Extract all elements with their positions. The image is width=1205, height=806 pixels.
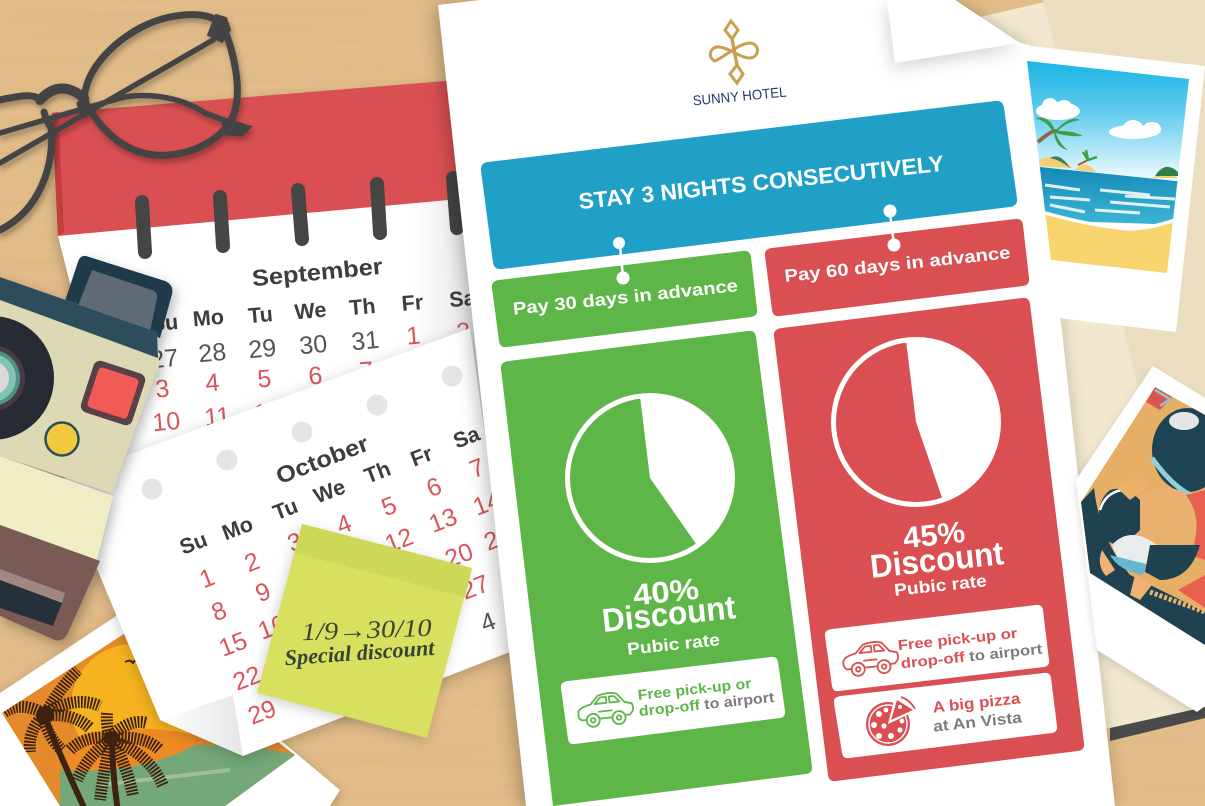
- folded corner: [160, 695, 243, 756]
- September grid: 1: [405, 321, 421, 351]
- September grid: 27: [149, 344, 179, 374]
- October grid: 4: [477, 607, 500, 638]
- October grid: 13: [425, 502, 461, 539]
- binder holes: [142, 366, 462, 500]
- Pubic rate label: Pubic rate: [893, 571, 988, 600]
- logo mark: [710, 21, 758, 83]
- viewfinder: [64, 256, 172, 338]
- September grid: 2: [455, 317, 471, 347]
- September grid: Su: [150, 310, 179, 336]
- card: airport transfer: [561, 657, 785, 744]
- September grid: [149, 286, 478, 437]
- panel: 60 days tag: [765, 219, 1029, 316]
- October grid: 15: [215, 626, 251, 663]
- October grid: 3: [284, 527, 307, 558]
- connector to 60 days: [884, 204, 900, 252]
- card text: Free pick-up or: [637, 676, 752, 704]
- folder under the poster: [980, 0, 1205, 741]
- red button: [79, 359, 147, 427]
- Pubic rate label: Pubic rate: [626, 630, 721, 659]
- September grid: 4: [204, 368, 221, 398]
- sticky note date: 1/9→30/10: [301, 615, 433, 646]
- Discount label: Discount: [868, 534, 1005, 585]
- September grid: Mo: [192, 305, 225, 331]
- header text: STAY 3 NIGHTS CONSECUTIVELY: [577, 151, 945, 214]
- icon: car: [576, 691, 635, 728]
- 40% value: 40%: [631, 573, 701, 612]
- yellow button: [46, 422, 78, 456]
- October grid: Sa: [450, 421, 484, 453]
- pie chart 45%: [834, 339, 999, 504]
- October grid: [176, 421, 516, 731]
- September grid: 31: [350, 326, 380, 356]
- icon: pizza: [866, 697, 915, 746]
- poster sheet: [438, 0, 1115, 806]
- October grid: 22: [229, 660, 265, 697]
- card text: A big pizza: [932, 690, 1022, 717]
- October grid: Th: [361, 457, 394, 488]
- September grid: 6: [307, 361, 323, 391]
- panel: green offer: [501, 331, 812, 806]
- September grid: We: [293, 298, 327, 324]
- October grid: 7: [466, 453, 489, 484]
- calendar: September: [52, 79, 500, 520]
- September grid: 3: [154, 374, 170, 404]
- October grid: 16: [254, 609, 290, 646]
- camera body: [0, 277, 159, 493]
- calendar: October sheet: [60, 328, 515, 756]
- October grid: 5: [378, 491, 401, 522]
- September grid: 11: [203, 402, 231, 432]
- October grid: 12: [381, 522, 417, 559]
- September grid: 12: [252, 398, 282, 428]
- October grid: 14: [469, 485, 505, 522]
- October grid: 20: [441, 537, 477, 574]
- October grid: 6: [423, 472, 446, 503]
- September grid: 28: [197, 338, 227, 368]
- October grid: Su: [176, 527, 211, 560]
- September grid: Sa: [448, 286, 478, 312]
- connector to 30 days: [613, 237, 630, 284]
- sticky note: [257, 524, 472, 738]
- October grid: We: [310, 475, 349, 508]
- card: airport transfer: drop-off to airport: [638, 690, 775, 720]
- October grid: Tu: [270, 494, 301, 525]
- blue header panel: [481, 101, 1017, 269]
- photo: beach: [1020, 45, 1205, 332]
- 45% value: 45%: [901, 516, 967, 555]
- October grid: 29: [244, 694, 280, 731]
- Discount label: Discount: [600, 588, 737, 639]
- card: pizza: [834, 673, 1057, 758]
- folded top corner of poster: [887, 0, 1020, 63]
- card text: Free pick-up or: [897, 626, 1018, 654]
- September grid: 10: [151, 407, 181, 437]
- calendar rings: [142, 178, 457, 252]
- October grid: 2: [241, 547, 264, 578]
- September grid: Tu: [247, 302, 274, 328]
- October grid: 1: [196, 563, 219, 594]
- calendar binding red: [52, 79, 470, 236]
- calendar page: [58, 198, 500, 520]
- September grid: 7: [358, 356, 374, 386]
- tag text 30 days: Pay 30 days in advance: [512, 275, 739, 319]
- October grid: 27: [457, 569, 493, 606]
- lens: [0, 316, 54, 440]
- September grid: 29: [247, 334, 277, 364]
- photo: kid character: [1070, 366, 1205, 712]
- logo: Sunny Hotel: [692, 21, 787, 108]
- September grid: Fr: [401, 290, 425, 316]
- panel: 30 days tag: [492, 251, 757, 347]
- glasses: [0, 15, 250, 230]
- October grid: 4: [333, 509, 356, 540]
- panel: red offer: [774, 298, 1084, 781]
- card: pizza: at An Vista: [932, 709, 1023, 736]
- card: airport transfer: [825, 605, 1049, 691]
- October grid: 9: [252, 577, 275, 608]
- September heading: September: [251, 253, 384, 291]
- October grid: Fr: [407, 441, 436, 472]
- September grid: Th: [348, 294, 377, 320]
- September grid: 30: [298, 330, 328, 360]
- pie chart 40%: [568, 395, 733, 560]
- tag text 60 days: Pay 60 days in advance: [783, 242, 1012, 286]
- October grid: Mo: [219, 512, 256, 545]
- photo: palm sunset: [0, 610, 340, 806]
- icon: car: [841, 640, 900, 677]
- October grid: 8: [208, 596, 231, 627]
- card: airport transfer: drop-off to airport: [900, 642, 1043, 672]
- instant camera: [0, 256, 172, 640]
- logo wordmark: SUNNY HOTEL: [692, 84, 787, 108]
- September grid: 5: [256, 364, 272, 394]
- sticky note caption: Special discount: [284, 635, 436, 670]
- October grid: 21: [480, 520, 516, 557]
- October heading: October: [272, 430, 372, 489]
- palm trunks and fronds: [3, 670, 163, 806]
